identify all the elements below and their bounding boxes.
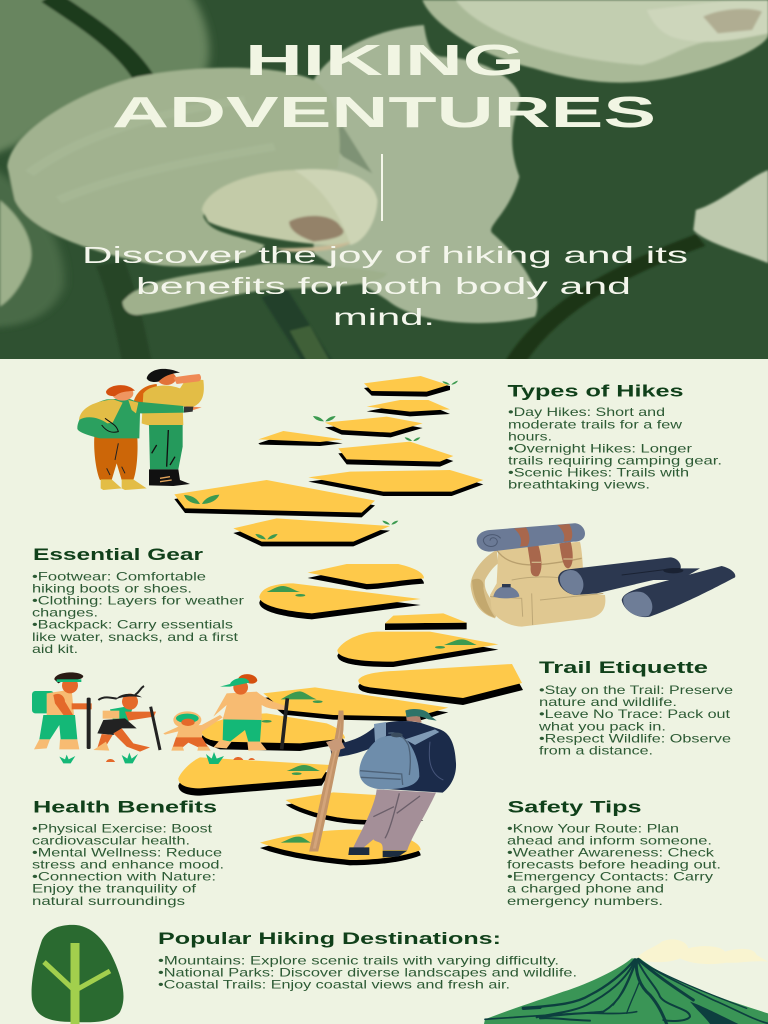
- panel: popular hiking destinations: [158, 930, 577, 992]
- title: HIKING: [245, 36, 525, 85]
- mounds on stones: [262, 691, 323, 843]
- list text: [32, 822, 224, 908]
- far-left lit petal: [0, 200, 32, 307]
- list text: •Overnight Hikes: Longer: [508, 442, 692, 456]
- lower-left petal: [122, 263, 387, 315]
- list text: [32, 570, 244, 656]
- adult with backpack: [32, 672, 92, 749]
- list text: •Emergency Contacts: Carry: [507, 870, 713, 884]
- list text: •Leave No Trace: Pack out: [539, 707, 731, 721]
- list text: •Backpack: Carry essentials: [32, 618, 233, 632]
- grass and pebbles: [59, 752, 255, 764]
- list text: what you pack in.: [538, 720, 666, 734]
- list text: emergency numbers.: [507, 894, 663, 908]
- trousers: [353, 789, 436, 850]
- list text: trails requiring camping gear.: [508, 454, 722, 468]
- stepping stone path: [174, 376, 523, 865]
- head and cap: [406, 715, 422, 723]
- child girl: [93, 686, 160, 752]
- list text: •Respect Wildlife: Observe: [539, 732, 731, 746]
- rear hiker: [133, 369, 204, 486]
- right flower: [693, 170, 768, 263]
- dorsal petal: [314, 25, 537, 323]
- subtitle: [82, 242, 688, 330]
- jacket: [330, 721, 456, 793]
- icon: green mountain: [484, 958, 768, 1024]
- backpack: [374, 722, 439, 745]
- front hiker: [77, 385, 193, 490]
- backpack: [471, 523, 605, 627]
- list text: from a distance.: [539, 744, 653, 758]
- illustration: hiker with walking stick: [330, 709, 456, 857]
- list text: aid kit.: [32, 642, 78, 656]
- top-right flower: [422, 0, 768, 83]
- vertical divider line: [381, 154, 383, 221]
- list text: •Physical Exercise: Boost: [32, 822, 213, 836]
- illustration: couple of hikers: [77, 369, 204, 490]
- panel: types of hikes: [508, 383, 722, 492]
- list text: •Footwear: Comfortable: [32, 570, 206, 584]
- icon: cloud: [637, 939, 768, 964]
- list text: •Know Your Route: Plan: [507, 822, 679, 836]
- hand on stick: [326, 738, 345, 752]
- illustration: backpack and binoculars: [471, 523, 735, 627]
- list text: forecasts before heading out.: [507, 858, 721, 872]
- list text: •Scenic Hikes: Trails with: [508, 466, 689, 480]
- list text: like water, snacks, and a first: [32, 630, 239, 644]
- blurred left petals: [0, 0, 209, 327]
- main left petal: [7, 68, 340, 267]
- list text: natural surroundings: [32, 894, 185, 908]
- panel: trail etiquette: [538, 659, 733, 758]
- heading: Popular Hiking Destinations:: [158, 930, 501, 948]
- illustration: hiking family: [32, 672, 288, 764]
- list text: •Weather Awareness: Check: [507, 846, 715, 860]
- list text: stress and enhance mood.: [32, 858, 224, 872]
- walking stick: [311, 712, 342, 850]
- list text: •Connection with Nature:: [32, 870, 216, 884]
- list text: •Mountains: Explore scenic trails with varying difficulty.: [158, 953, 559, 967]
- panel: hero orchid photo background: [0, 0, 768, 363]
- shoes: [348, 847, 407, 857]
- subtitle: Discover the joy of hiking and its: [82, 242, 688, 268]
- list text: [158, 953, 577, 992]
- title: [112, 36, 656, 137]
- heading: Health Benefits: [33, 798, 217, 816]
- icon: tree: [32, 925, 123, 1024]
- list text: [508, 405, 722, 492]
- adult with cap: [213, 674, 288, 751]
- heading: Trail Etiquette: [539, 659, 708, 677]
- panel: health benefits: [32, 798, 224, 908]
- list text: cardiovascular health.: [32, 834, 190, 848]
- list text: hiking boots or shoes.: [32, 582, 192, 596]
- panel: safety tips: [507, 799, 721, 908]
- list text: •Mental Wellness: Reduce: [32, 846, 222, 860]
- panel: essential gear: [32, 546, 244, 656]
- list text: Enjoy the tranquility of: [32, 882, 197, 896]
- list text: a charged phone and: [507, 882, 664, 896]
- list text: •Day Hikes: Short and: [508, 405, 665, 419]
- heading: Safety Tips: [508, 799, 642, 817]
- list text: moderate trails for a few: [508, 418, 682, 432]
- toddler: [163, 711, 223, 751]
- list text: [507, 822, 721, 908]
- list text: •Clothing: Layers for weather: [32, 594, 244, 608]
- heading: Types of Hikes: [508, 383, 684, 401]
- list text: hours.: [508, 430, 552, 444]
- list text: •Coastal Trails: Enjoy coastal views and fresh air.: [158, 978, 510, 992]
- list text: •Stay on the Trail: Preserve: [539, 683, 733, 697]
- list text: nature and wildlife.: [539, 695, 677, 709]
- heading: Essential Gear: [33, 546, 204, 564]
- title: ADVENTURES: [112, 88, 656, 137]
- list text: breathtaking views.: [508, 478, 650, 492]
- list text: •National Parks: Discover diverse landscapes and wildlife.: [158, 965, 577, 979]
- subtitle: benefits for both body and: [136, 273, 631, 299]
- leaves on stones: [184, 381, 477, 649]
- stems: [49, 0, 701, 363]
- list text: [538, 683, 733, 758]
- list text: ahead and inform someone.: [507, 834, 712, 848]
- centre lip: [202, 170, 350, 246]
- subtitle: mind.: [333, 304, 435, 330]
- binoculars: [558, 557, 735, 617]
- list text: changes.: [32, 606, 98, 620]
